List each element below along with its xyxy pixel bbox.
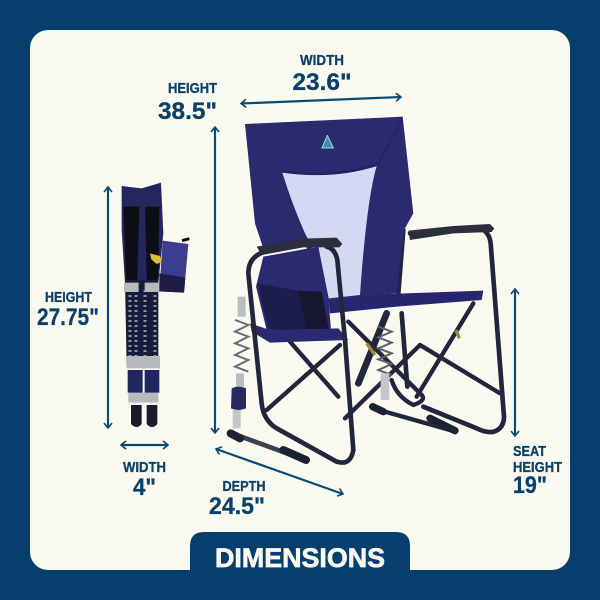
chair back	[245, 117, 413, 303]
label: seat height 19: 19"	[513, 472, 547, 499]
label: height 38.5: 38.5"	[158, 98, 217, 125]
folded seat fabric	[122, 183, 163, 283]
illustration: folded chair	[122, 183, 189, 427]
label: folded height 27.75: HEIGHT	[45, 289, 92, 306]
label: seat height 19: HEIGHT	[513, 459, 562, 476]
label: depth 24.5	[209, 478, 266, 520]
near spring assembly	[231, 297, 248, 428]
mesh pockets	[257, 283, 307, 334]
near rocker feet	[231, 433, 306, 460]
label: folded width 4: WIDTH	[123, 459, 166, 476]
seat	[328, 291, 483, 313]
illustration: rocking chair	[231, 117, 504, 463]
side cup holder	[159, 241, 188, 293]
label: folded height 27.75	[37, 289, 99, 331]
arrow: folded width	[121, 444, 168, 446]
label: width 23.6: 23.6"	[292, 69, 352, 96]
near frame	[237, 247, 353, 463]
feet	[131, 405, 157, 427]
label: height 38.5: HEIGHT	[168, 80, 217, 97]
yellow accents	[367, 330, 459, 355]
blue sleeves	[128, 370, 159, 393]
far rocker foot	[373, 407, 455, 431]
silver clamps	[124, 283, 160, 403]
arrow: folded height	[107, 187, 109, 428]
arrow: seat height	[514, 289, 516, 436]
label: folded width 4: 4"	[133, 474, 156, 501]
mesh panel	[282, 166, 377, 298]
pocket strap	[250, 323, 348, 343]
label: width 23.6	[292, 52, 352, 96]
mesh top hem	[282, 165, 377, 174]
label: folded width 4	[123, 459, 166, 501]
armrests	[257, 238, 342, 255]
body between legs	[125, 280, 158, 367]
label: width 23.6: WIDTH	[300, 52, 344, 69]
side pocket	[256, 247, 332, 343]
tab: dimensions heading: DIMENSIONS	[215, 543, 385, 573]
label: height 38.5	[158, 80, 217, 125]
spring lattice	[130, 290, 155, 363]
tab: dimensions heading	[190, 532, 410, 573]
label: seat height 19	[513, 443, 562, 499]
label: seat height 19: SEAT	[513, 443, 546, 460]
label: folded height 27.75: 27.75"	[37, 304, 99, 331]
far spring	[378, 327, 392, 375]
logo badge	[322, 135, 333, 148]
arrow: chair width	[241, 97, 401, 104]
chair far-side frame and rockers	[267, 228, 504, 432]
yellow latch	[150, 253, 162, 264]
back seams	[377, 119, 402, 166]
arrow: chair height	[214, 127, 216, 433]
folded dark frame	[123, 207, 159, 280]
label: depth 24.5: DEPTH	[222, 478, 266, 495]
label: depth 24.5: 24.5"	[209, 493, 265, 520]
arrow: chair depth	[216, 449, 343, 494]
